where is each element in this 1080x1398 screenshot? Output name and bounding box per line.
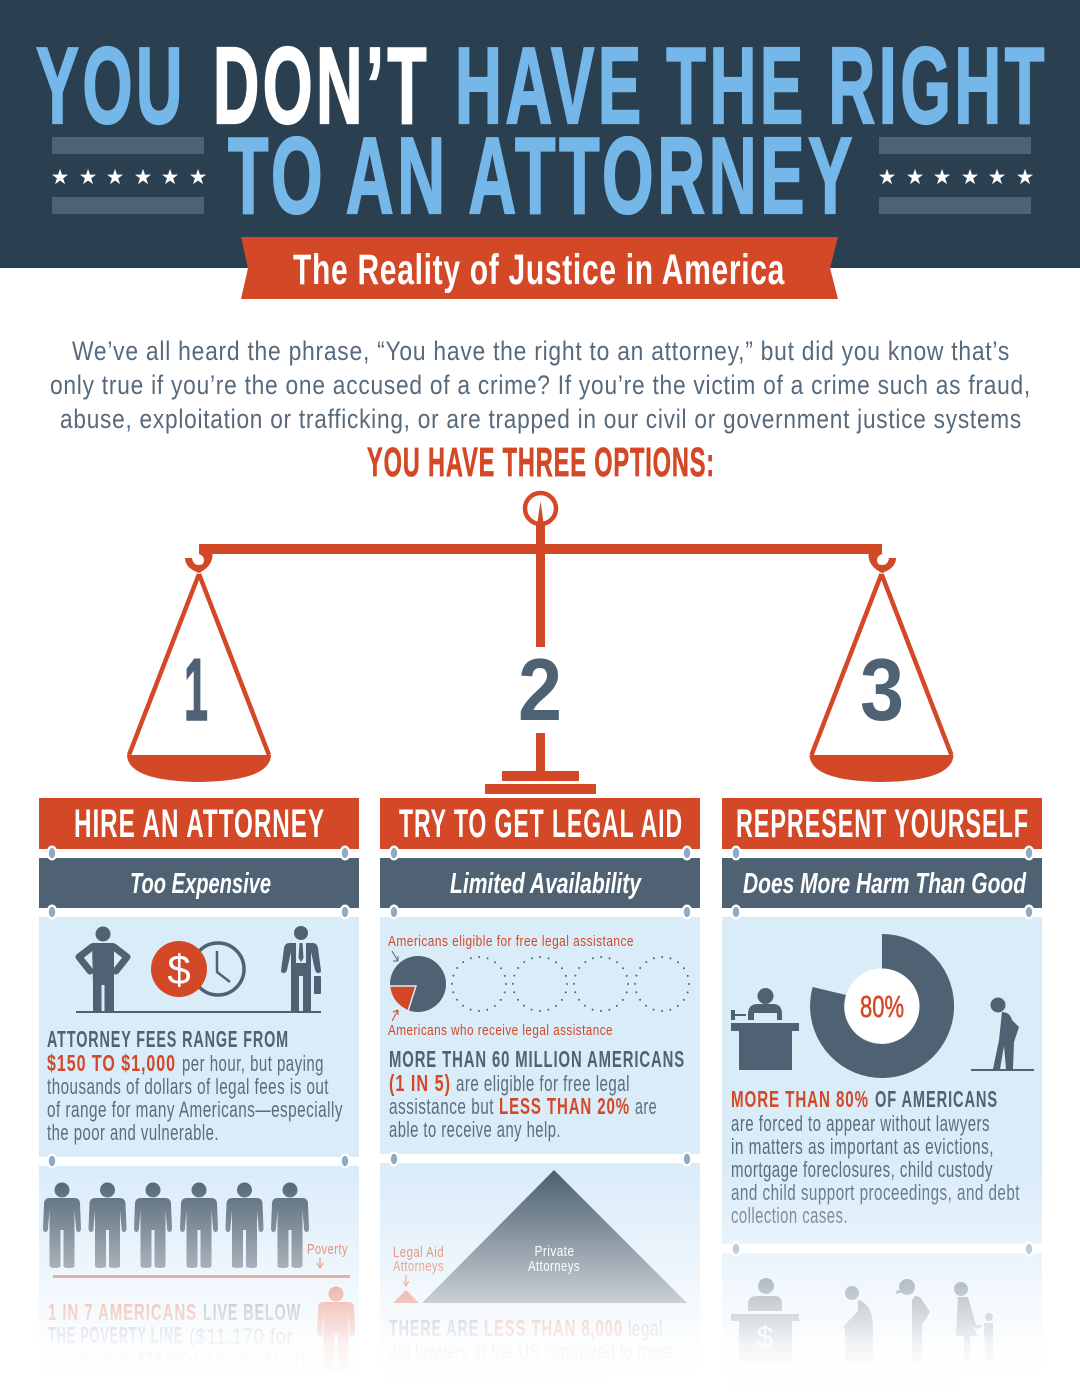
chart: one in seven people bbox=[43, 1182, 355, 1372]
chart: one in five pie: Americans eligible for free legal assistance bbox=[388, 933, 634, 950]
right stripes and stars: ★ bbox=[933, 166, 951, 189]
text: sixty million americans: (1 IN 5) bbox=[389, 1070, 451, 1096]
text: one in seven in poverty: ($11,170 for bbox=[189, 1324, 293, 1349]
icon: attorney with briefcase bbox=[281, 926, 321, 1011]
text: sixty million americans bbox=[389, 1046, 685, 1142]
icon: judge at bench bbox=[731, 988, 799, 1070]
option numbers: 2 bbox=[518, 640, 562, 739]
icon: dollar and clock: $ bbox=[167, 946, 191, 993]
left stripes and stars: ★ bbox=[51, 166, 69, 189]
icon: dollar and clock bbox=[151, 941, 244, 997]
text: sixty million americans: MORE THAN 60 MILLION AMERICANS bbox=[389, 1046, 685, 1072]
right stripes and stars: ★ bbox=[988, 166, 1006, 189]
bottom fade overlay bbox=[0, 1175, 1080, 1398]
text: eighty percent without lawyers bbox=[731, 1086, 1020, 1228]
text: fewer than eight thousand: THERE ARE bbox=[389, 1315, 479, 1341]
left stripes and stars: ★ bbox=[134, 166, 152, 189]
text: attorney fees: $150 TO $1,000 bbox=[47, 1050, 176, 1076]
text: sixty million americans: are eligible for free legal bbox=[456, 1071, 630, 1096]
option numbers bbox=[184, 640, 904, 739]
icon: dejected person bbox=[971, 998, 1034, 1071]
option numbers: 1 bbox=[184, 640, 208, 739]
text: attorney fees: per hour, but paying bbox=[182, 1051, 324, 1076]
text: unrepresented seniors: UNREPRESENTED SENIORS bbox=[731, 1372, 958, 1398]
chart: one in five pie bbox=[388, 933, 689, 1039]
text: attorney fees: thousands of dollars of legal fees is out bbox=[47, 1074, 329, 1099]
text: one in seven in poverty: THE POVERTY LINE bbox=[48, 1322, 183, 1348]
text: eighty percent without lawyers: MORE THAN 80% bbox=[731, 1086, 869, 1112]
panel: legal aid bbox=[380, 798, 700, 1398]
panel: hire an attorney bbox=[39, 798, 359, 1398]
right stripes and stars: ★ bbox=[906, 166, 924, 189]
panel: legal aid: Limited Availability bbox=[450, 868, 642, 900]
text: attorney fees: of range for many Americans—especially bbox=[47, 1097, 343, 1122]
text: eighty percent without lawyers: OF AMERICANS bbox=[875, 1086, 998, 1112]
scales of justice bbox=[127, 493, 954, 794]
right stripes and stars: ★ bbox=[961, 166, 979, 189]
title: YOU bbox=[36, 25, 186, 147]
text: sixty million americans: LESS THAN 20% bbox=[499, 1093, 630, 1119]
text: one in seven in poverty bbox=[48, 1299, 305, 1372]
chart: attorney triangles bbox=[393, 1170, 687, 1303]
text: one in seven in poverty: an individual, $23,050 for family of four) bbox=[48, 1347, 305, 1372]
chart: eighty percent donut: 80% bbox=[860, 989, 904, 1024]
text: fewer than eight thousand: LESS THAN 8,000 bbox=[484, 1315, 623, 1341]
text: eighty percent without lawyers: collection cases. bbox=[731, 1203, 848, 1228]
option numbers: 3 bbox=[860, 640, 904, 739]
left stripes and stars: ★ bbox=[106, 166, 124, 189]
header band bbox=[0, 0, 1080, 268]
left stripes and stars bbox=[51, 137, 207, 214]
text: sixty million americans: are bbox=[635, 1094, 657, 1119]
right stripes and stars: ★ bbox=[1016, 166, 1034, 189]
icon: client with empty pockets bbox=[79, 926, 127, 1011]
left stripes and stars: ★ bbox=[161, 166, 179, 189]
right stripes and stars bbox=[878, 137, 1034, 214]
chart: attorney triangles: Attorneys bbox=[528, 1258, 580, 1275]
chart: attorney triangles: Private bbox=[534, 1243, 574, 1260]
text: attorney fees: ATTORNEY FEES RANGE FROM bbox=[47, 1026, 289, 1052]
text: fewer than eight thousand: aid lawyers in the US compared to more bbox=[389, 1339, 674, 1364]
text: sixty million americans: able to receive any help. bbox=[389, 1117, 561, 1142]
panel pins bbox=[46, 846, 1034, 1256]
subtitle ribbon bbox=[241, 237, 838, 299]
chart: one in five pie: Americans who receive legal assistance bbox=[388, 1022, 613, 1039]
panel: legal aid: TRY TO GET LEGAL AID bbox=[399, 802, 683, 846]
chart: one in seven people: Poverty bbox=[307, 1241, 348, 1258]
intro paragraph bbox=[50, 336, 1031, 434]
panel: hire an attorney: Too Expensive bbox=[130, 868, 271, 900]
left stripes and stars: ★ bbox=[189, 166, 207, 189]
chart: attorney triangles: Attorneys bbox=[393, 1258, 444, 1275]
ground line bbox=[76, 1011, 321, 1013]
icons: judge and vulnerable people bbox=[731, 1278, 993, 1361]
subtitle ribbon: The Reality of Justice in America bbox=[293, 246, 785, 294]
title bbox=[36, 25, 1048, 237]
panel: represent yourself bbox=[722, 798, 1042, 1398]
text: one in seven in poverty: 1 IN 7 AMERICANS bbox=[48, 1299, 197, 1325]
three options heading: YOU HAVE THREE OPTIONS: bbox=[367, 439, 715, 485]
text: fewer than eight thousand: legal bbox=[628, 1316, 663, 1341]
title: DON’T bbox=[213, 25, 430, 147]
text: attorney fees: the poor and vulnerable. bbox=[47, 1120, 219, 1145]
text: one in seven in poverty: LIVE BELOW bbox=[203, 1299, 301, 1325]
text: sixty million americans: assistance but bbox=[389, 1094, 494, 1119]
text: fewer than eight thousand bbox=[389, 1315, 674, 1387]
panel: hire an attorney: HIRE AN ATTORNEY bbox=[74, 802, 325, 846]
right stripes and stars: ★ bbox=[878, 166, 896, 189]
text: fewer than eight thousand: than 844,000 private attorneys. bbox=[389, 1362, 614, 1387]
icons: judge and vulnerable people: $ bbox=[757, 1321, 774, 1354]
chart: eighty percent donut bbox=[810, 934, 954, 1078]
left stripes and stars: ★ bbox=[79, 166, 97, 189]
text: attorney fees bbox=[47, 1026, 343, 1145]
chart: attorney triangles: Legal Aid bbox=[393, 1244, 444, 1261]
